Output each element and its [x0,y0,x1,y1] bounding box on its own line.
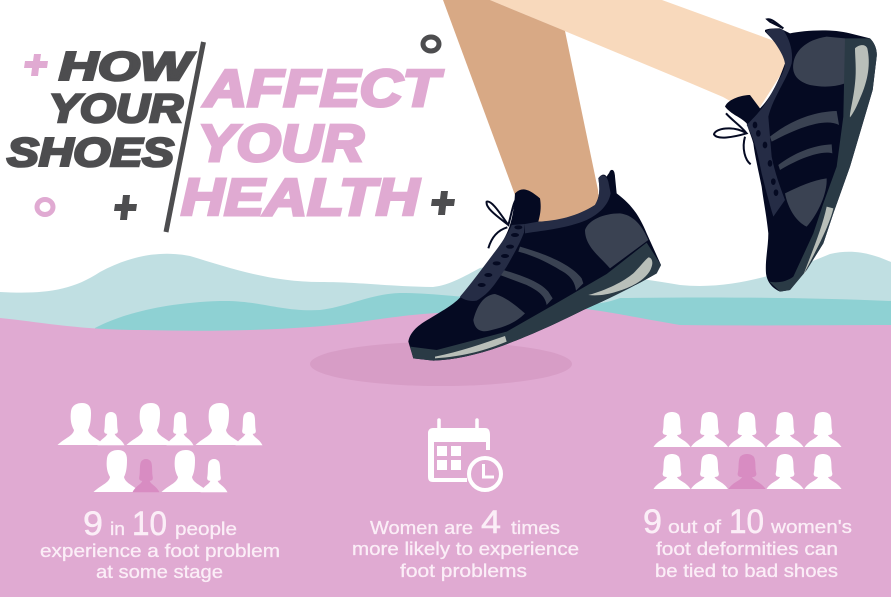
stat: 9 in 10 people: in [110,518,125,539]
title: how your shoes: YOUR [49,87,183,131]
stat: 9 out of 10 women's [643,503,852,581]
title: how your shoes [7,45,195,175]
title divider [166,42,204,232]
stat: women are 4 times [352,504,579,581]
ring: dark [423,37,439,51]
title: how your shoes: SHOES [7,131,174,175]
stat: women are 4 times: 4 [481,504,501,540]
title: how your shoes: HOW [59,45,195,89]
background: teal wave [95,293,891,597]
stat: 9 in 10 people: people [175,518,237,539]
stat: 9 out of 10 women's: be tied to bad shoes [655,560,838,581]
stat: women are 4 times: Women are [370,517,473,538]
stat: 9 out of 10 women's: out of [668,516,722,537]
stat: 9 out of 10 women's: women's [770,516,852,537]
stat: women are 4 times: more likely to experience [352,538,579,559]
stat: 9 in 10 people: experience a foot problem [40,540,280,561]
stat: 9 in 10 people: 10 [132,505,167,543]
title: affect your health: HEALTH [181,169,421,227]
stat: 9 in 10 people: 9 [83,505,103,543]
stat: 9 in 10 people [40,505,280,582]
plus: dark right [431,191,455,215]
icon: people group [58,403,263,492]
icon: women group [654,412,842,489]
stat: 9 out of 10 women's: 9 [643,503,662,541]
background: light teal wave [0,252,891,597]
background: pink ground [0,308,891,597]
stat: women are 4 times: foot problems [400,560,527,581]
shoe shadow [310,342,572,386]
title: affect your health: AFFECT [202,60,444,118]
plus: pink [24,54,48,76]
icon: calendar with clock [428,420,501,490]
ring: pink [37,200,53,214]
illustration: front shoe [408,171,661,361]
rear leg [490,0,790,115]
illustration: rear shoe [714,19,877,292]
front leg [443,0,600,225]
stat: 9 out of 10 women's: foot deformities can [656,538,838,559]
title: affect your health: YOUR [198,115,364,173]
stat: 9 in 10 people: at some stage [96,561,223,582]
stat: women are 4 times: times [511,517,560,538]
plus: dark left [114,195,137,220]
title: affect your health [181,60,444,227]
stat: 9 out of 10 women's: 10 [729,503,764,541]
